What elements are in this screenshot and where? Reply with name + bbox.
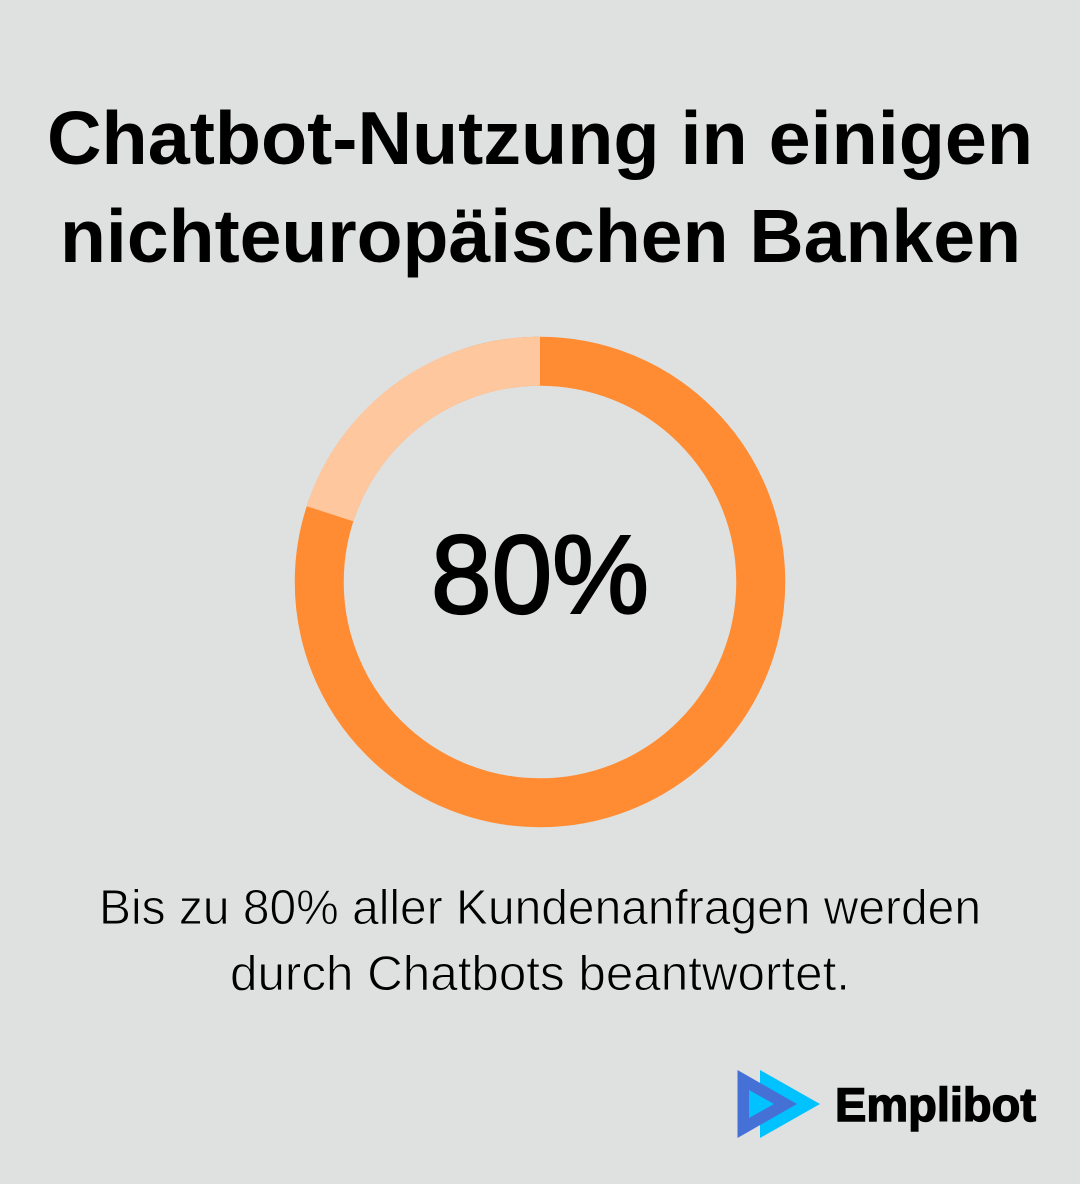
description text: Bis zu 80% aller Kundenanfragen werden [99,881,981,935]
description text [99,881,981,1001]
center value: 80% [431,513,649,637]
title: Chatbot-Nutzung in einigen [47,96,1033,180]
donut chart: 80% [319,361,761,803]
icon: play triangles [738,1070,820,1138]
logo: Emplibot [738,1070,1036,1138]
description text: durch Chatbots beantwortet. [230,947,850,1001]
wordmark: Emplibot [835,1078,1036,1131]
title: nichteuropäischen Banken [60,194,1021,278]
title [47,96,1033,278]
